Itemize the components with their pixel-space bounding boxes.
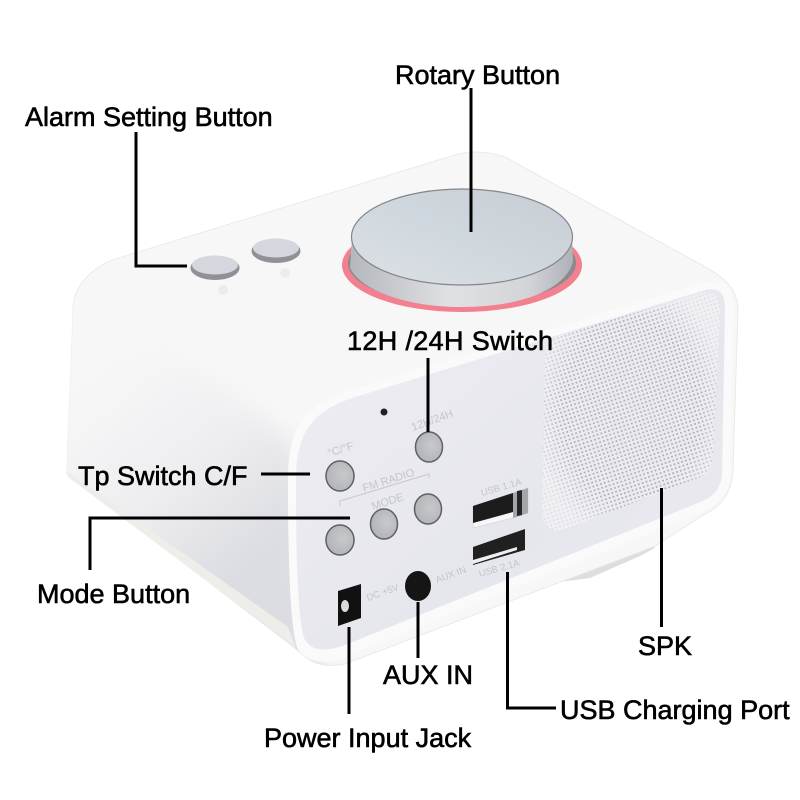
- label: Alarm Setting Button: Alarm Setting Button: [25, 102, 273, 132]
- mic hole: [380, 408, 388, 416]
- speaker grille: [542, 292, 720, 530]
- front panel: [296, 289, 725, 650]
- label: Mode Button: Mode Button: [37, 579, 190, 609]
- panel labels: USB 2.1A: [478, 558, 522, 580]
- panel labels: 12H/24H: [410, 408, 455, 434]
- left side shading: [67, 307, 323, 664]
- label: Power Input Jack: Power Input Jack: [264, 723, 472, 753]
- panel labels: [326, 408, 524, 604]
- base strip: [68, 472, 296, 648]
- panel labels: USB 1.1A: [480, 477, 524, 499]
- rotary button: [342, 189, 582, 312]
- front panel rim: [288, 281, 733, 662]
- panel labels: AUX IN: [434, 565, 468, 586]
- panel labels: DC +5V: [365, 582, 401, 604]
- label: 12H /24H Switch: 12H /24H Switch: [347, 326, 553, 356]
- label: AUX IN: AUX IN: [383, 660, 473, 690]
- panel labels: MODE: [370, 491, 405, 513]
- panel labels: °C/°F: [326, 440, 355, 460]
- device body: [67, 152, 738, 665]
- power jack: [338, 584, 361, 626]
- usb ports: [473, 488, 528, 565]
- panel buttons: [326, 432, 442, 555]
- aux jack: [405, 571, 431, 601]
- label: USB Charging Port: USB Charging Port: [560, 695, 790, 725]
- panel labels: FM RADIO: [361, 467, 416, 495]
- foot shadow: [560, 543, 655, 582]
- alarm clock device: [40, 152, 738, 690]
- callout lines: [90, 88, 662, 714]
- label: Rotary Button: Rotary Button: [395, 60, 560, 90]
- alarm buttons: [190, 238, 300, 295]
- label: SPK: SPK: [638, 631, 692, 661]
- label: Tp Switch C/F: Tp Switch C/F: [78, 461, 248, 491]
